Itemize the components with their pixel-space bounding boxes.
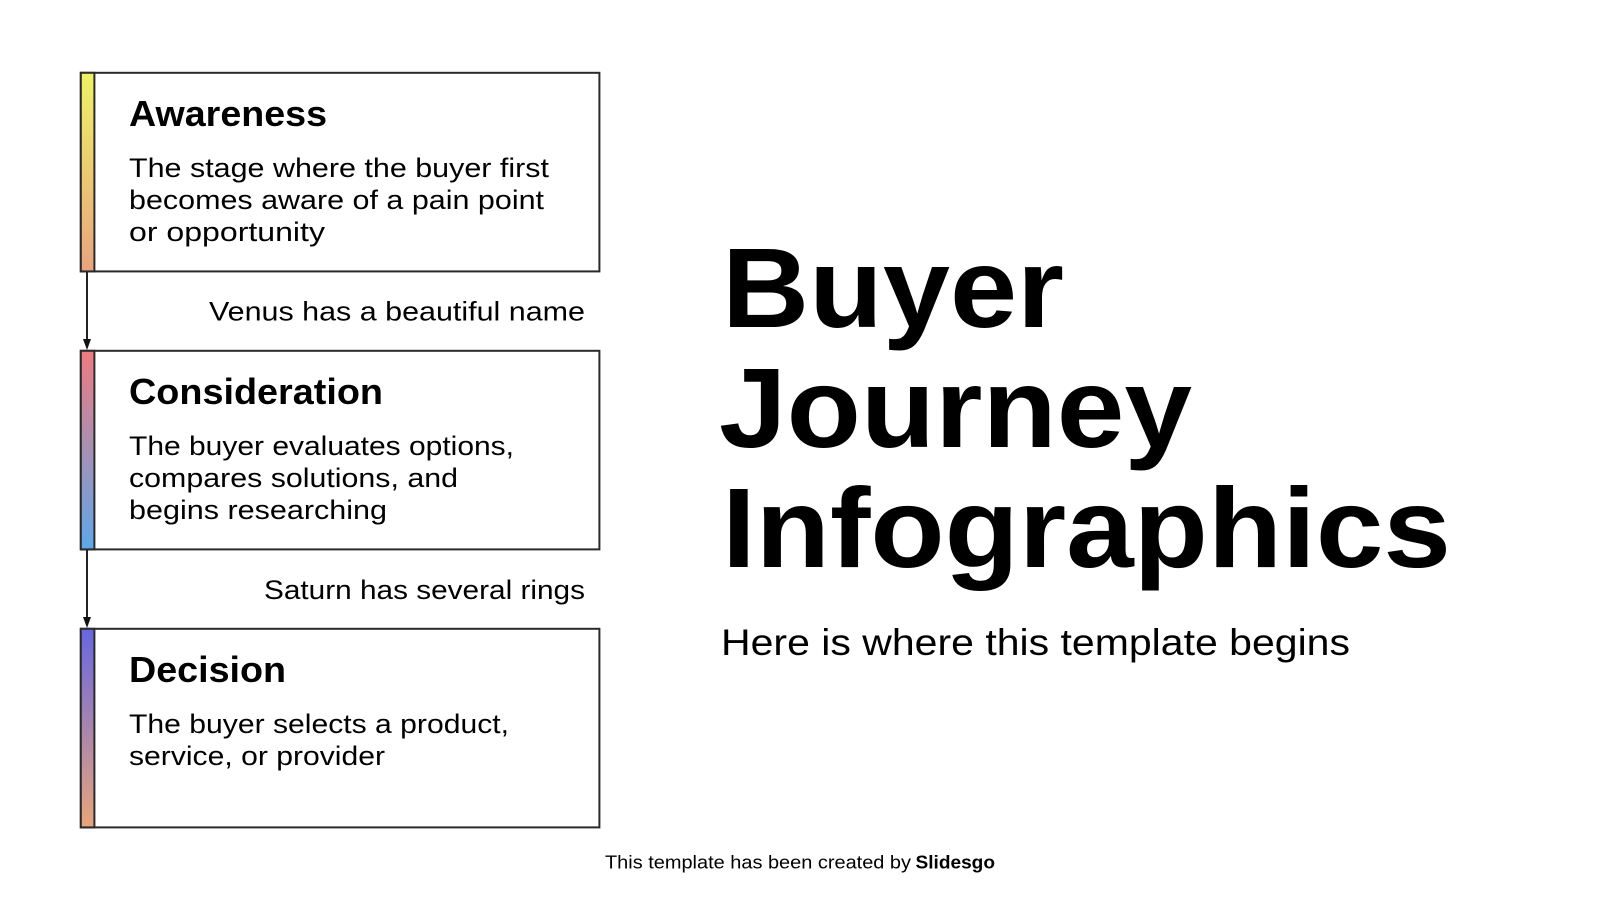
description: The buyer evaluates options,: [129, 431, 514, 461]
gradient bar: [81, 351, 94, 549]
description: service, or provider: [129, 741, 385, 771]
footer credit: Slidesgo: [916, 852, 995, 872]
gradient bar: [81, 73, 94, 271]
title: Infographics: [722, 465, 1451, 591]
description: [129, 709, 509, 771]
footer credit: This template has been created by: [605, 852, 912, 872]
description: compares solutions, and: [129, 463, 458, 493]
panel: decision: [81, 629, 599, 827]
title: [719, 225, 1451, 591]
box outline: [81, 629, 599, 827]
description: begins researching: [129, 495, 387, 525]
panel: consideration: [81, 351, 599, 549]
description: The stage where the buyer first: [129, 153, 550, 183]
gradient bar: [81, 629, 94, 827]
description: or opportunity: [129, 217, 326, 247]
heading: Decision: [129, 649, 286, 690]
description: becomes aware of a pain point: [129, 185, 545, 215]
arrow: awareness to consideration: [83, 272, 91, 350]
box outline: [81, 351, 599, 549]
title: Buyer: [722, 225, 1064, 351]
heading: Awareness: [129, 93, 327, 134]
note: saturn: Saturn has several rings: [264, 575, 585, 605]
description: The buyer selects a product,: [129, 709, 509, 739]
note: venus: Venus has a beautiful name: [209, 296, 585, 326]
description: [129, 431, 514, 525]
subtitle: Here is where this template begins: [721, 622, 1350, 663]
title: Journey: [719, 345, 1192, 471]
description: [129, 153, 550, 247]
arrow: consideration to decision: [83, 550, 91, 628]
panel: awareness: [81, 73, 599, 271]
box outline: [81, 73, 599, 271]
heading: Consideration: [129, 371, 383, 412]
